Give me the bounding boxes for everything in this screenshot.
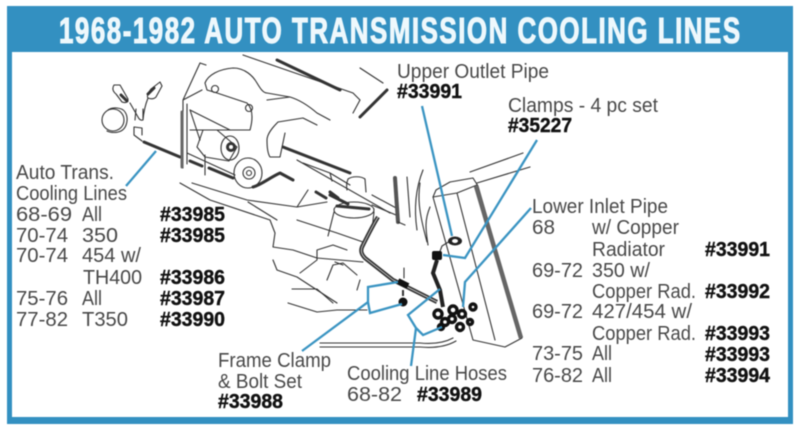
label: lower inlet pipe table: #33992 xyxy=(705,281,770,303)
label: auto trans cooling lines table: 70-74 xyxy=(16,245,68,267)
label: lower inlet pipe table: 350 w/ xyxy=(592,260,650,282)
label: lower inlet pipe table: Copper Rad. xyxy=(592,281,696,303)
label: lower inlet pipe table: w/ Copper xyxy=(591,217,679,239)
label: auto trans cooling lines table: #33985 xyxy=(160,204,225,226)
label: upper outlet pipe: Upper Outlet Pipe xyxy=(397,61,549,83)
label: lower inlet pipe table: 69-72 xyxy=(532,301,583,323)
label: lower inlet pipe table: 73-75 xyxy=(532,343,583,365)
label: auto trans cooling lines table xyxy=(16,162,225,331)
label: frame clamp and bolt set: Frame Clamp xyxy=(218,350,331,372)
label: upper outlet pipe xyxy=(397,61,549,103)
upper cooling line and fittings xyxy=(432,236,462,307)
icon: starter motor xyxy=(187,130,262,188)
label: lower inlet pipe table: All xyxy=(592,365,612,387)
label: auto trans cooling lines table: #33986 xyxy=(160,267,225,289)
transmission line to radiator xyxy=(361,217,437,302)
label: auto trans cooling lines table: Cooling Lines xyxy=(16,183,127,205)
diagram: engine, radiator and cooling lines xyxy=(102,55,530,347)
leader: frame clamp xyxy=(302,282,402,351)
label: lower inlet pipe table: Lower Inlet Pipe xyxy=(532,196,668,218)
label: auto trans cooling lines table: All xyxy=(82,288,102,310)
label: auto trans cooling lines table: 77-82 xyxy=(16,309,68,331)
label: lower inlet pipe table: #33991 xyxy=(705,239,770,261)
label: auto trans cooling lines table: 70-74 xyxy=(16,225,68,247)
icon: radiator xyxy=(433,153,530,347)
label: auto trans cooling lines table: 350 xyxy=(82,225,118,247)
label: lower inlet pipe table: #33993 xyxy=(705,323,770,345)
label: cooling line hoses xyxy=(347,363,507,406)
label: auto trans cooling lines table: #33987 xyxy=(160,288,225,310)
label: lower inlet pipe table: 427/454 w/ xyxy=(592,301,692,323)
hose clamp cluster xyxy=(434,304,476,330)
label: cooling line hoses: 68-82 xyxy=(347,384,402,406)
icon: reservoir cap xyxy=(328,177,398,236)
icon: firewall knob and connectors xyxy=(102,82,162,141)
label: frame clamp and bolt set: #33988 xyxy=(218,391,283,413)
transmission cooling line xyxy=(144,142,180,157)
leader: lower inlet pipe xyxy=(463,208,531,307)
label: clamps: #35227 xyxy=(508,115,572,137)
label: auto trans cooling lines table: 454 w/ xyxy=(82,245,141,267)
label: auto trans cooling lines table: TH400 xyxy=(83,267,142,289)
label: lower inlet pipe table: Copper Rad. xyxy=(592,323,696,345)
leader: cooling line hoses xyxy=(408,289,442,366)
label: lower inlet pipe table: #33993 xyxy=(705,344,770,366)
label: auto trans cooling lines table: 75-76 xyxy=(16,288,68,310)
label: frame clamp and bolt set xyxy=(218,350,331,413)
label: auto trans cooling lines table: T350 xyxy=(82,309,128,331)
title: 1968-1982 AUTO TRANSMISSION COOLING LINES xyxy=(59,11,740,51)
label: auto trans cooling lines table: #33990 xyxy=(160,309,225,331)
label: cooling line hoses: Cooling Line Hoses xyxy=(347,363,507,385)
frame clamp and bolt xyxy=(398,268,408,306)
label: clamps xyxy=(508,95,658,137)
label: lower inlet pipe table: #33994 xyxy=(705,365,771,387)
leader: upper outlet pipe xyxy=(422,106,452,236)
label: lower inlet pipe table: 68 xyxy=(532,217,555,239)
label: lower inlet pipe table: 76-82 xyxy=(532,365,583,387)
leader: clamps xyxy=(443,140,537,258)
engine outline xyxy=(182,55,390,220)
label: auto trans cooling lines table: 68-69 xyxy=(16,204,72,226)
label: auto trans cooling lines table: Auto Trans. xyxy=(16,162,114,184)
label: clamps: Clamps - 4 pc set xyxy=(508,95,658,117)
label: auto trans cooling lines table: #33985 xyxy=(160,225,225,247)
label: lower inlet pipe table: All xyxy=(592,343,612,365)
label: upper outlet pipe: #33991 xyxy=(397,81,462,103)
label: cooling line hoses: #33989 xyxy=(417,384,482,406)
leader lines xyxy=(126,106,537,366)
label: lower inlet pipe table: 69-72 xyxy=(532,260,583,282)
label: frame clamp and bolt set: & Bolt Set xyxy=(218,371,302,393)
leader: auto trans cooling lines xyxy=(126,151,156,186)
label: auto trans cooling lines table: All xyxy=(82,204,102,226)
label: lower inlet pipe table xyxy=(532,196,771,387)
label: lower inlet pipe table: Radiator xyxy=(592,239,665,261)
body panels and chassis xyxy=(180,170,456,347)
